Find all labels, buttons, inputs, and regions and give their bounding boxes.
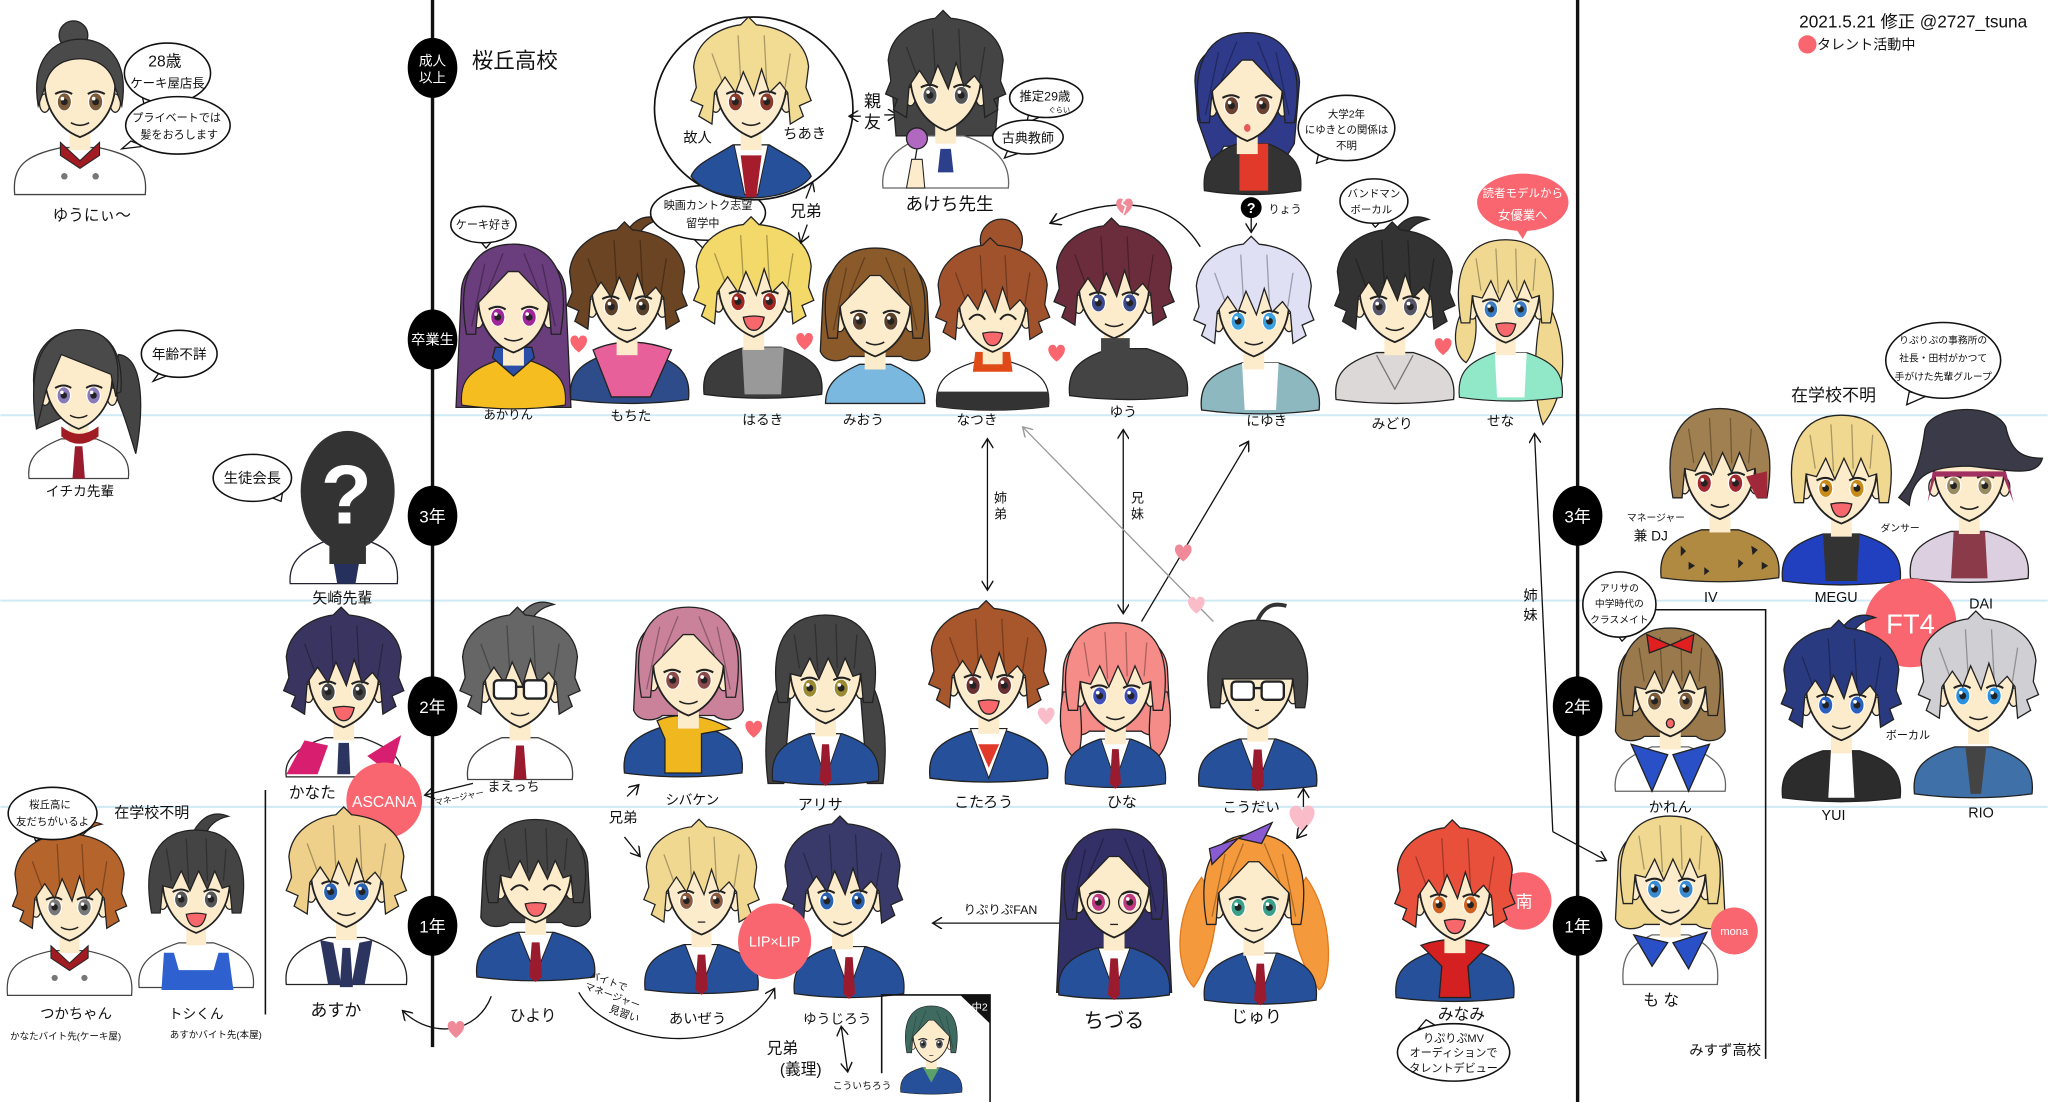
name: こたろう [954,794,1013,811]
timeline axis: 桜丘高校 [431,0,434,1047]
speech bubble: 先輩グループ: りぷりぷの事務所の [1899,333,1987,346]
label: マネージャー兼DJ [1627,512,1685,544]
circle frame [654,17,853,200]
talent bubble: 読者モデルから女優業へ: 読者モデルから [1483,186,1563,200]
character: みおう [820,248,930,427]
portrait [691,17,811,198]
portrait [1199,605,1317,791]
heart [1048,345,1065,362]
name: IV [1704,590,1718,606]
speech bubble: ケーキ好き [451,206,516,248]
portrait [1615,628,1726,791]
label: 親友 [849,92,897,132]
name: アリサ [798,797,843,814]
portrait [1054,218,1188,400]
mystery badge [1241,197,1262,232]
speech bubble: バンドマンボーカル: バンドマン [1348,188,1400,200]
speech bubble: 映画カントク志望 [651,185,765,248]
portrait [1180,823,1328,1005]
label: 兄弟: 兄弟 [790,203,822,221]
character: MEGU [1782,415,1901,606]
character: ゆうにぃ〜 [14,21,146,225]
name: YUI [1822,808,1845,824]
character: RIO [1914,611,2039,821]
arrow: 姉妹 せな to もな: 姉 [1523,588,1538,605]
credit and legend: 2021.5.21 修正 @2727_tsuna [1799,11,2028,31]
character: ゆう [1054,218,1188,420]
arrow: 姉妹 せな to もな [1523,433,1606,860]
portrait [782,816,904,999]
speech bubble: 大学2年: 大学2年 [1328,108,1365,121]
speech bubble: 大学2年: 不明 [1336,140,1357,152]
mystery badge: ? [1247,201,1256,217]
panel: 中2 こういちろう [882,995,990,1102]
label: 兄弟(義理): 兄弟 [767,1040,798,1058]
character: つかちゃん [7,822,132,1042]
speech bubble: private: 髪をおろします [140,127,218,141]
label: 兄弟 シバケン・あいぜう: 兄弟 [609,810,638,827]
portrait [644,819,759,995]
arrow: 姉妹 せな to もな: 妹 [1523,607,1538,624]
title: 桜丘高校 [472,49,558,73]
speech bubble: クラスメイト: クラスメイト [1590,614,1649,626]
speech bubble: 28歳: ケーキ屋店長 [130,76,205,90]
portrait [286,807,407,987]
speech bubble: ケーキ好き: ケーキ好き [456,217,511,231]
character: あすか [286,807,407,1020]
character: IV [1661,409,1779,606]
name: みなみ [1438,1006,1485,1024]
portrait [883,10,1009,188]
portrait [7,822,132,995]
arrow: 姉弟 [987,439,1007,590]
grade badges: 卒業生 [411,332,454,349]
character: イチカ先輩 [29,330,141,499]
label: ボーカル: ボーカル [1886,729,1930,742]
speech bubble: 28歳 [124,43,211,104]
character: トシくん [139,814,262,1041]
speech bubble: 桜丘高に友だちがいるよ: 桜丘高に [29,798,71,811]
name: シバケン [665,792,719,807]
character: こたろう [929,601,1049,811]
name: みおう [843,412,884,427]
portrait [139,814,254,990]
talent circle: FT4 [1865,578,1956,667]
speech bubble: クラスメイト [1583,572,1656,641]
arrow: 姉弟: 弟 [994,506,1007,521]
arrow: ひな to にゆき [1142,441,1249,622]
portrait [901,1006,962,1094]
outer frame line: left column [264,790,266,1015]
character: りょう [1195,33,1302,232]
speech bubble: MVオーディション: オーディションで [1410,1045,1498,1059]
speech bubble: 映画カントク志望: 留学中 [686,216,719,230]
frame: みすず高校 [1652,610,1766,1059]
speech bubble: 先輩グループ: 社長・田村がかつて [1899,352,1987,365]
portrait [1661,409,1779,582]
name: RIO [1968,805,1994,821]
name: もちた [610,408,652,423]
name: ひな [1107,794,1137,811]
speech bubble: 28歳: 28歳 [148,53,182,71]
portrait [1060,623,1170,789]
grade badges: 2年 [419,698,446,717]
character: ひな [1060,623,1170,811]
name: せな [1487,414,1514,429]
character: にゆき [1194,236,1320,429]
character: 矢崎先輩 [290,431,398,607]
grade badges: 3年 [419,507,446,526]
talent bubble: 読者モデルから女優業へ [1477,174,1568,239]
label: 親友: 親 [864,92,881,111]
speech bubble: 推定29歳 [1010,78,1083,123]
label: 兄弟 シバケン・あいぜう [609,785,640,857]
speech bubble: 古典教師: 古典教師 [1002,130,1054,145]
portrait [1914,611,2039,798]
name: ちあき [783,125,826,142]
speech bubble: クラスメイト: アリサの [1600,582,1639,594]
name: も な [1643,991,1679,1009]
label: 兄弟(義理): (義理) [780,1061,822,1079]
label: 兄弟(義理) [767,1026,848,1079]
name: ゆうじろう [803,1012,872,1027]
portrait [284,607,404,777]
speech bubble: private: プライベートでは [132,111,221,124]
talent circle: 南 [1494,872,1551,930]
portrait [1455,240,1563,425]
arrow: マネージャー: マネージャー [434,787,485,808]
speech bubble: 桜丘高に友だちがいるよ [8,787,97,841]
name: あいぜう [669,1011,726,1028]
speech bubble: 桜丘高に友だちがいるよ: 友だちがいるよ [16,815,89,828]
silhouette portrait: ? [321,448,372,542]
grade badges: 3年 [1564,507,1591,526]
portrait [936,219,1050,410]
name: あすか [310,1001,361,1020]
arrows and heart: こうだい and じゅり [1290,789,1315,838]
speech bubble: MVオーディション: タレントデビュー [1409,1061,1498,1075]
portrait [820,248,930,403]
arc: にゆき to なつき with broken heart [1050,197,1200,247]
name: ゆうにぃ〜 [53,207,131,225]
portrait [1899,410,2042,582]
arc: バイトでマネージャー見習い: 見習い [607,1003,641,1025]
name: トシくん [169,1006,224,1021]
portrait [456,244,571,409]
arc: バイトでマネージャー見習い [579,969,775,1039]
talent circle: ASCANA: ASCANA [352,794,417,811]
character: かなた [284,607,404,802]
character: ひより [476,820,595,1025]
name: なつき [956,412,998,427]
corner tag: 中2 [971,1001,988,1014]
talent circle: ASCANA [346,763,422,838]
speech bubble: 先輩グループ: 手がけた先輩グループ [1895,370,1992,383]
label: 親友: 友 [864,113,881,132]
speech bubble: 映画カントク志望: 映画カントク志望 [664,199,752,212]
portrait [766,615,885,786]
name: まえっち [487,779,540,794]
character: みどり [1335,217,1455,431]
grade badges: 1年 [1564,917,1591,936]
timeline axis: みすず高校 [1576,0,1579,1102]
speech bubble: 大学2年 [1298,95,1395,163]
portrait [1195,33,1301,195]
character: せな [1455,240,1563,429]
character: YUI [1781,615,1901,824]
speech bubble: 年齢不詳 [141,330,217,381]
talent circle: 南: 南 [1516,892,1533,911]
workplace note: かなたバイト先(ケーキ屋) [10,1030,121,1042]
name: 矢崎先輩 [312,590,372,607]
speech bubble: 古典教師 [993,120,1063,158]
heart [1435,338,1451,355]
note: こういちろう: こういちろう [833,1080,891,1092]
talent circle: mona [1711,907,1758,954]
portrait [460,602,580,779]
character: ゆうじろう [782,816,904,1027]
speech bubble: 年齢不詳: 年齢不詳 [152,347,207,362]
speech bubble: 先輩グループ [1886,323,2001,405]
grade badges: 1年 [419,917,446,936]
name: こうだい [1222,800,1280,816]
portrait [624,607,743,777]
name: ちづる [1084,1010,1144,1033]
character: かれん [1615,628,1726,816]
name: かれん [1649,799,1692,816]
name: かなた [289,784,336,802]
speech bubble: private [122,97,230,154]
speech bubble: 推定29歳: 推定29歳 [1019,89,1070,104]
name: MEGU [1815,590,1858,606]
character: シバケン [624,607,743,807]
name: りょう [1269,203,1302,216]
talent circle: LIP×LIP [738,904,811,979]
label: マネージャー兼DJ: 兼 DJ [1634,529,1668,544]
arrow: 兄妹: 妹 [1131,506,1144,521]
credit and legend: タレント活動中 [1817,37,1915,53]
arrow: 兄妹 [1123,430,1144,614]
name: みどり [1372,416,1413,431]
name: あけち先生 [906,194,994,214]
talent circle: LIP×LIP: LIP×LIP [749,935,800,951]
character: アリサ [766,615,885,814]
character: もちた [567,217,689,423]
portrait [14,21,146,195]
name: イチカ先輩 [46,484,114,499]
grade badges: 以上 [419,70,446,85]
name: はるき [742,412,783,427]
character: ちあき (portrait circle) [654,17,853,200]
speech bubble: 推定29歳: ぐらい [1048,106,1070,114]
heart [1038,708,1055,725]
name: ゆう [1110,405,1137,420]
portrait [567,217,689,403]
grade badges: 2年 [1564,698,1591,717]
talent circle: mona: mona [1720,926,1749,938]
portrait [29,330,141,479]
character: はるき [694,217,822,427]
label: 在学校不明 left: 在学校不明 [114,804,189,821]
grade guide lines [0,415,2048,807]
arc: ひより to あすか [402,996,491,1038]
speech bubble: 生徒会長 [213,454,292,501]
silhouette portrait [290,431,398,584]
grade badges [408,38,1602,956]
name: つかちゃん [40,1005,112,1022]
note: 故人: 故人 [683,129,712,146]
arrow: リプリプFAN [933,903,1061,923]
arrow: 姉弟: 姉 [994,491,1007,506]
arc: バイトでマネージャー見習い: マネージャー [583,980,642,1012]
label: みすず高校: みすず高校 [1689,1042,1761,1059]
portrait [1615,816,1725,984]
character: こうだい [1199,605,1317,816]
talent circle: FT4: FT4 [1886,608,1935,639]
speech bubble: バンドマンボーカル: ボーカル [1350,204,1392,216]
character: DAI [1899,410,2042,612]
credit and legend [1798,11,2028,54]
name: あかりん [483,408,533,422]
portrait [1782,415,1901,585]
character: あけち先生 [883,10,1009,214]
workplace note: あすかバイト先(本屋) [170,1029,262,1041]
character: あかりん [456,244,571,422]
arrow: こうだい to なつき (broken) [1023,427,1213,622]
character: もな [1615,816,1725,1009]
name: じゅり [1231,1007,1282,1026]
name: DAI [1969,596,1993,612]
portrait [476,820,595,982]
character: ちづる [1057,829,1172,1033]
label: 兄弟 [790,181,822,243]
portrait [1194,236,1320,414]
talent bubble: 読者モデルから女優業へ: 女優業へ [1498,207,1548,222]
speech bubble: 大学2年: にゆきとの関係は [1305,123,1388,136]
speech bubble: MVオーディション [1397,1020,1510,1081]
heart [796,333,813,350]
portrait [1335,217,1455,403]
name: にゆき [1246,414,1287,429]
character: みなみ [1395,820,1515,1024]
name: ひより [510,1008,556,1025]
arc: バイトでマネージャー見習い: バイトで [588,969,629,994]
label: 在学校不明 right: 在学校不明 [1791,386,1876,405]
heart [570,336,587,353]
portrait [1395,820,1515,1001]
speech bubble: クラスメイト: 中学時代の [1595,597,1644,610]
portrait [1057,829,1172,1000]
portrait [1781,615,1901,802]
label: ダンサー: ダンサー [1881,521,1920,534]
arrow: 兄妹: 兄 [1131,491,1144,506]
character: なつき [936,219,1050,427]
character: あいぜう [644,819,759,1028]
character: じゅり [1180,823,1328,1026]
speech bubble: バンドマンボーカル [1340,179,1408,227]
heart [745,721,762,738]
label: マネージャー兼DJ: マネージャー [1627,512,1685,524]
speech bubble: 生徒会長: 生徒会長 [224,470,281,487]
speech bubble: MVオーディション: りぷりぷMV [1423,1032,1485,1045]
portrait [929,601,1049,782]
portrait [694,217,822,398]
character: まえっち [460,602,580,794]
arrow: リプリプFAN: りぷりぷFAN [964,903,1037,917]
grade badges: 成人 [419,53,447,68]
